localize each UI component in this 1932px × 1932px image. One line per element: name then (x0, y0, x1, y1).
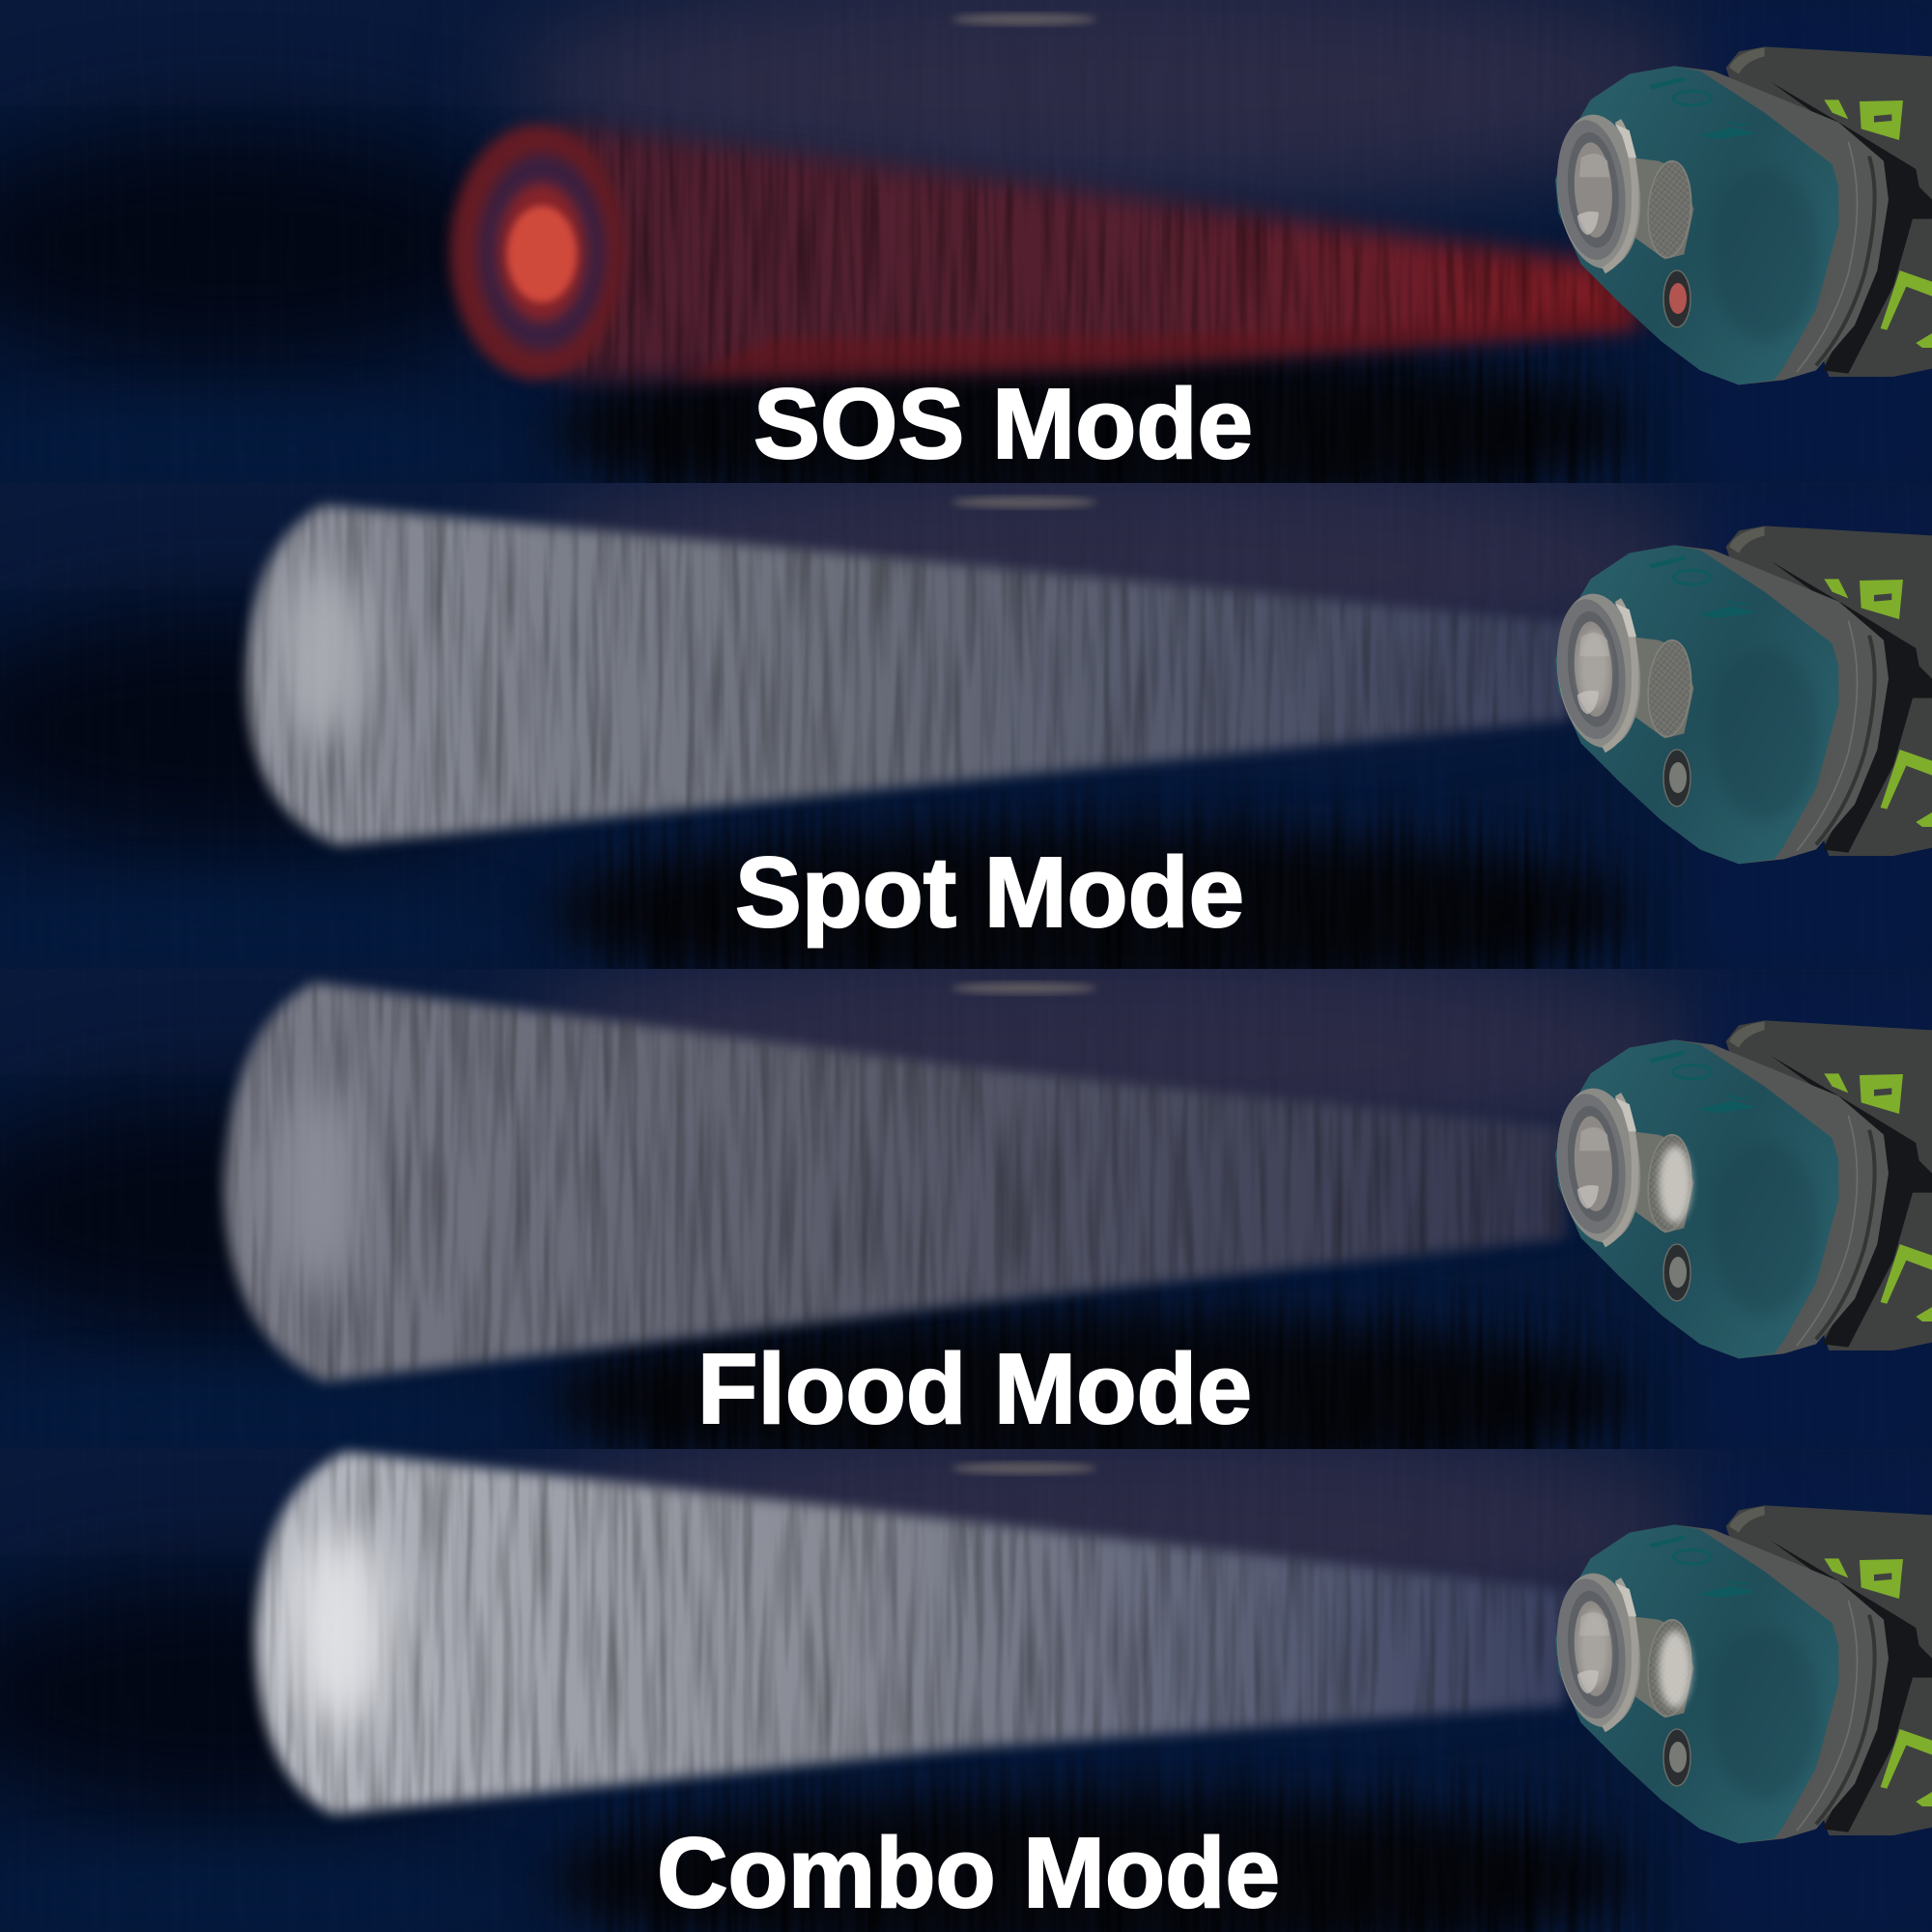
icon: headlamp with both lenses lit (1549, 1505, 1932, 1843)
panel: Flood mode (0, 969, 1932, 1449)
icon: headlamp with red LED (1549, 46, 1932, 384)
red beam spot (450, 125, 624, 380)
icon: headlamp with spot lens lit (1549, 526, 1932, 864)
panel: SOS mode (0, 0, 1932, 512)
icon: headlamp with flood lens lit (1549, 1020, 1932, 1358)
red beam (560, 126, 1642, 379)
panel: Combo mode (0, 1410, 1932, 1932)
flood beam (224, 982, 1565, 1381)
spot beam (246, 505, 1570, 845)
panel: Spot mode (0, 483, 1932, 969)
label: Combo Mode: Combo Mode (657, 1817, 1280, 1928)
label: Spot Mode: Spot Mode (735, 837, 1244, 948)
label: SOS Mode: SOS Mode (753, 368, 1253, 479)
combo beam (256, 1452, 1565, 1814)
label: Flood Mode: Flood Mode (697, 1333, 1252, 1444)
